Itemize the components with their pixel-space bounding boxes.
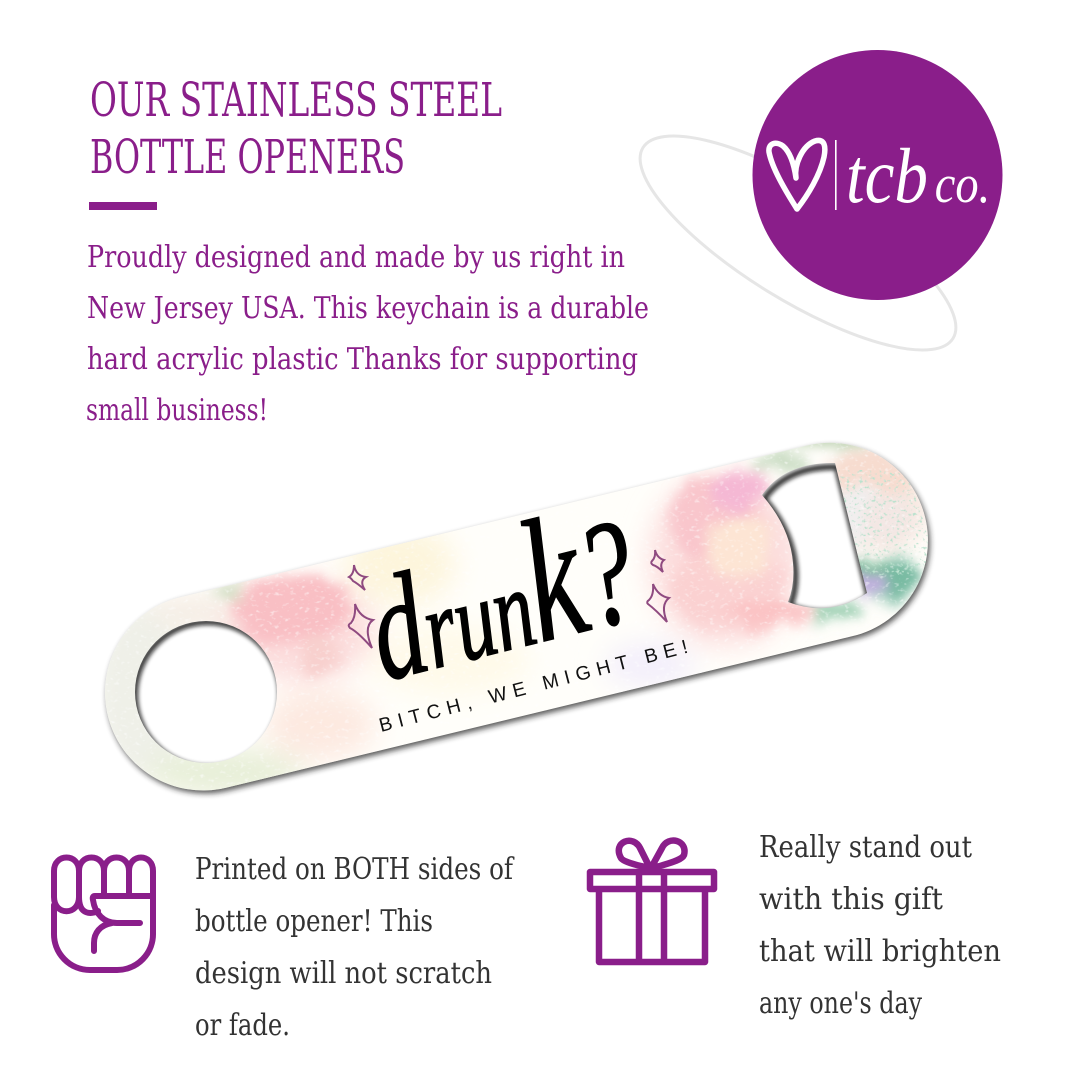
bottle cap opener hole — [762, 463, 869, 612]
heading: OUR STAINLESS STEEL — [90, 73, 502, 128]
opener shadow — [87, 426, 950, 814]
icon: heart — [769, 140, 825, 209]
opener speckle texture — [106, 443, 922, 790]
opener tagline: BITCH, WE MIGHT BE! — [377, 636, 690, 737]
icon: gift box — [590, 841, 714, 962]
opener printed body — [105, 442, 928, 790]
feature text: gift: Really stand out — [759, 830, 972, 865]
feature text: gift: with this gift — [759, 882, 943, 917]
heading: BOTTLE OPENERS — [90, 130, 405, 185]
intro text block: New Jersey USA. This keychain is a durable — [87, 291, 649, 326]
green speckles on opener end — [835, 470, 930, 575]
intro text block: small business! — [86, 393, 268, 428]
logo badge: tcbco. — [846, 132, 990, 219]
sparkles — [349, 550, 669, 648]
heading underline — [89, 202, 157, 210]
round opener hole — [135, 621, 281, 768]
feature text: gift: that will brighten — [759, 934, 1001, 969]
feature text: printed both sides: bottle opener! This — [195, 904, 433, 939]
heading — [90, 73, 502, 185]
bottle opener — [102, 441, 934, 798]
intro text block: Proudly designed and made by us right in — [87, 240, 625, 275]
feature text: printed both sides: Printed on BOTH sides of — [195, 852, 515, 887]
feature text: gift: any one's day — [759, 986, 922, 1021]
feature text: gift — [759, 830, 1001, 1021]
intro text block — [86, 240, 649, 428]
feature text: printed both sides — [195, 852, 515, 1043]
icon: raised fist — [54, 858, 153, 970]
feature text: printed both sides: design will not scratch — [195, 956, 492, 991]
feature text: printed both sides: or fade. — [195, 1008, 290, 1043]
opener lettering: drunk?: drunk? — [346, 464, 653, 718]
logo badge — [752, 50, 1002, 300]
logo orbit ring — [613, 99, 983, 387]
intro text block: hard acrylic plastic Thanks for supporting — [87, 342, 638, 377]
